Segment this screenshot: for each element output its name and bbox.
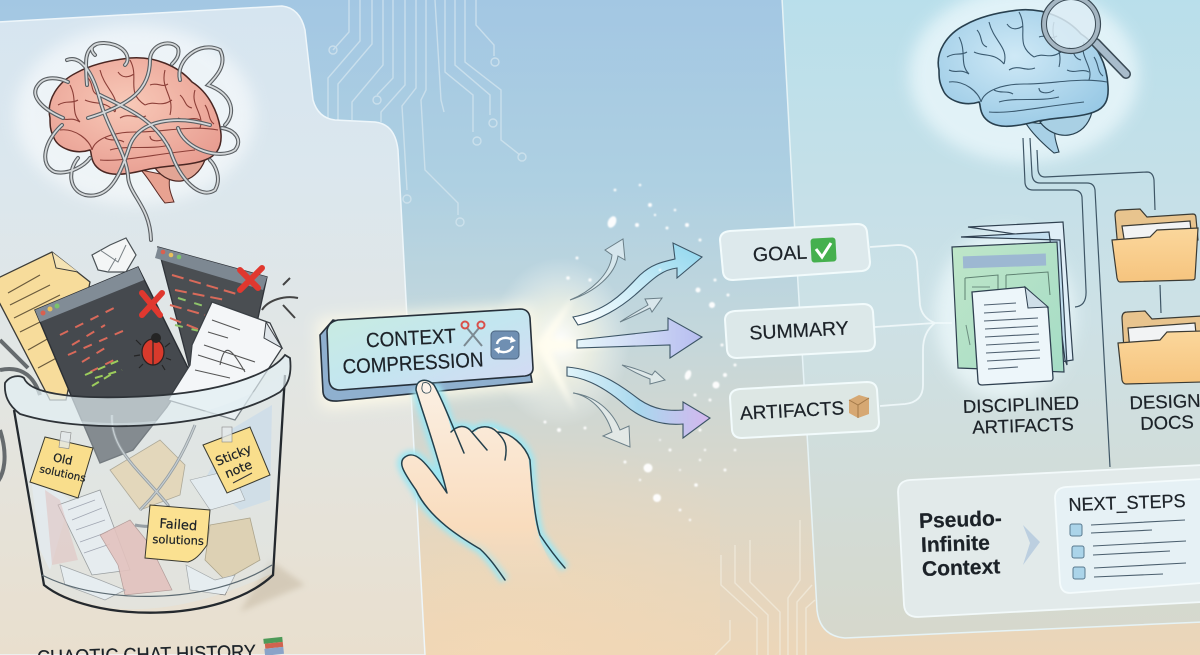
burst of light <box>490 257 630 427</box>
text: pseudo-infinite context: Infinite <box>921 532 990 557</box>
icon: scissors <box>462 322 484 346</box>
button: context compression <box>318 305 540 408</box>
bin body <box>12 372 285 609</box>
icon: pointing hand <box>402 380 565 590</box>
big arrow: artifacts <box>567 367 710 438</box>
sticky note: sticky note: note <box>222 456 254 481</box>
sticky note: old solutions: Old <box>52 450 74 468</box>
icon: disciplined artifacts document stack <box>935 222 1075 400</box>
sparkle particles <box>544 184 736 521</box>
thin arrows <box>570 239 665 447</box>
icon: refresh <box>491 331 519 359</box>
label: goal: GOAL <box>752 242 808 266</box>
warm glow bottom <box>300 380 720 655</box>
torn white paper <box>168 302 282 420</box>
icon: package <box>849 395 869 418</box>
icon: books <box>263 637 284 655</box>
text: pseudo-infinite context: Context <box>922 555 1001 581</box>
label: summary: SUMMARY <box>749 317 849 345</box>
label: artifacts: ARTIFACTS <box>740 398 845 425</box>
icon: tangled pink brain <box>15 25 255 240</box>
button: context compression: COMPRESSION <box>342 348 484 379</box>
text: pseudo-infinite context <box>919 507 1002 581</box>
bin shadow <box>240 560 305 612</box>
crumpled paper top <box>92 238 136 272</box>
card: next steps <box>1055 479 1200 593</box>
magnifier <box>1042 0 1126 74</box>
label: goal <box>720 224 870 280</box>
card: next steps: NEXT_STEPS <box>1068 490 1186 516</box>
icon: ladybug <box>134 333 171 370</box>
text: disciplined artifacts: ARTIFACTS <box>972 413 1074 438</box>
icon: check mark <box>810 237 837 263</box>
sticky note: sticky note <box>203 427 270 493</box>
panel: pseudo-infinite context <box>898 465 1200 617</box>
task lines <box>1091 520 1186 577</box>
brain cables <box>35 43 238 240</box>
button: context compression: CONTEXT <box>365 325 457 352</box>
side cable <box>0 340 40 485</box>
checkboxes <box>1070 524 1085 579</box>
panel: chaotic chat history <box>0 6 425 655</box>
sticky note: failed solutions <box>145 505 210 562</box>
icon: chevron <box>1023 525 1040 565</box>
icon: folder top <box>1112 209 1198 282</box>
icon: folder bottom <box>1118 311 1200 384</box>
text: design docs: DOCS <box>1140 411 1194 434</box>
code window back <box>155 247 267 370</box>
text: disciplined artifacts: DISCIPLINED <box>963 392 1079 417</box>
bin contents <box>110 440 185 510</box>
sticky note: old solutions: solutions <box>38 463 87 485</box>
text: design docs <box>1129 390 1200 434</box>
big arrow: summary <box>577 318 702 358</box>
text: disciplined artifacts <box>963 392 1079 438</box>
circuit traces top <box>328 0 526 226</box>
text: design docs: DESIGN <box>1129 390 1200 413</box>
bin cables <box>112 415 195 526</box>
code window front <box>35 267 190 463</box>
sticky note: failed solutions: Failed <box>159 517 198 534</box>
text: pseudo-infinite context: Pseudo- <box>919 507 1002 533</box>
circuit traces bottom <box>715 520 815 655</box>
icon: blue brain with magnifier <box>909 0 1139 163</box>
panel: disciplined context <box>782 0 1200 638</box>
sticky note: failed solutions: solutions <box>152 532 204 548</box>
arrows fan <box>567 239 710 447</box>
sticky note: old solutions <box>30 431 93 498</box>
yellow paper <box>0 252 90 400</box>
connector lines <box>870 245 952 406</box>
connector lines from brain <box>1023 138 1161 467</box>
big arrow: goal <box>573 243 702 325</box>
sticky note: sticky note: Sticky <box>213 441 254 469</box>
label: summary <box>725 304 875 358</box>
scribbles flying <box>262 278 298 318</box>
label: artifacts <box>730 382 879 438</box>
icon: red x marks <box>142 268 262 315</box>
bin rim <box>5 355 291 426</box>
icon: trash bin with chat history <box>0 238 305 613</box>
